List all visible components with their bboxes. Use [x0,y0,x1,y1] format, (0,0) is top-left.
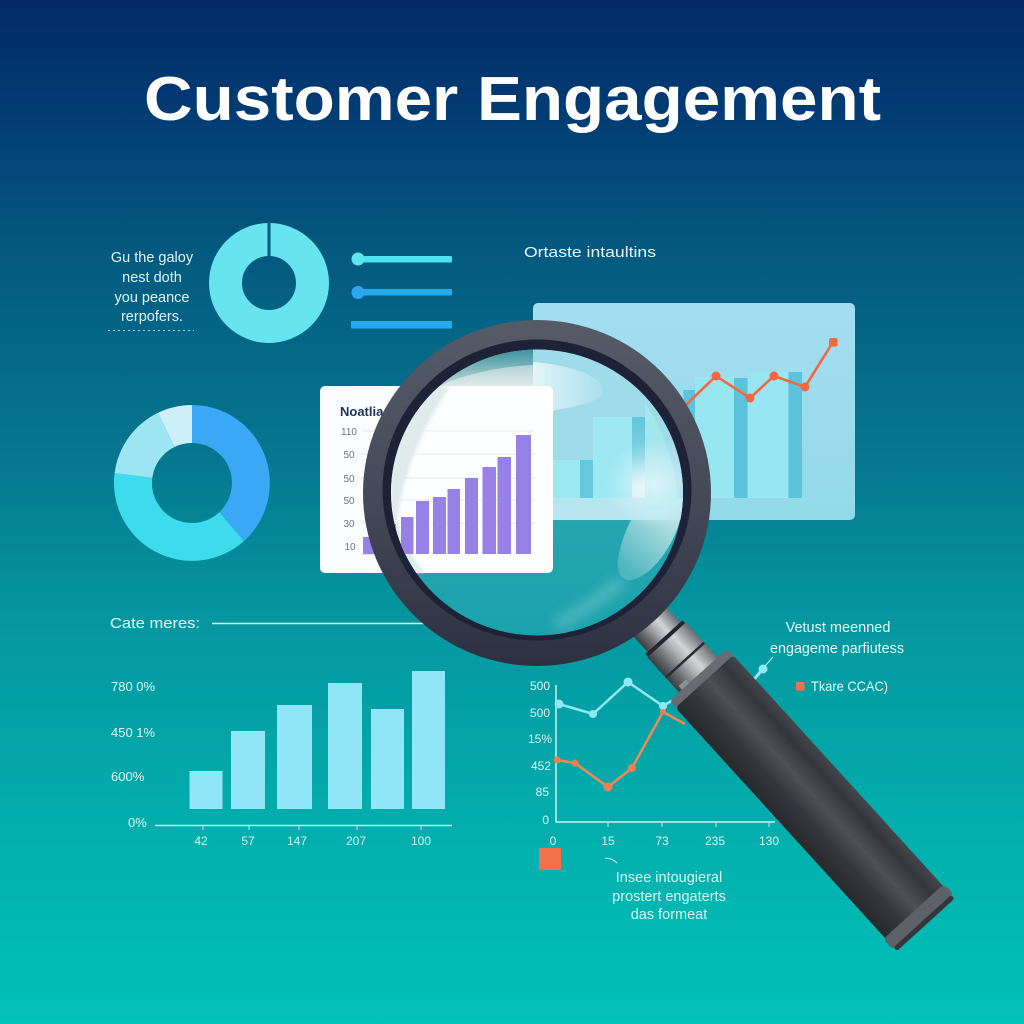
line chart: bottom right: 15% [528,732,552,746]
panel: white card with purple bar chart: 50 [343,450,355,461]
bar chart: bottom left: 600% [111,769,145,784]
panel: glass line and bar chart [533,303,855,520]
bar chart: bottom left [111,671,452,848]
line chart: bottom right: 0 [542,813,549,827]
text block: top left note: rerpofers. [121,309,183,325]
magnifier lens [385,349,705,636]
panel: white card with purple bar chart: 50 [343,496,355,507]
text block: top left note: nest doth [122,270,182,286]
bar chart: bottom left: 100 [411,834,431,848]
callout: right note: Tkare CCAC) [811,678,888,694]
text block: bottom insight: das formeat [631,907,707,923]
text block: top left note: you peance [115,290,189,306]
legend marker: orange square [539,848,561,870]
text block: bottom insight: Insee intougieral [616,870,722,886]
line chart: bottom right: 0 [550,834,557,848]
line chart: bottom right: 130 [759,834,779,848]
panel: white card with purple bar chart: Noatlia [340,404,384,419]
text block: top left note: Gu the galoy [111,250,194,266]
panel: white card with purple bar chart: 10 [344,542,356,553]
panel: white card with purple bar chart: 50 [343,474,355,485]
magnifier ring [363,320,711,666]
chart: bottom left heading and rule [110,615,487,632]
panel: white card with purple bar chart [320,386,553,573]
lens lower glare [618,520,680,580]
line chart: bottom right [528,678,779,848]
text block: bottom insight [605,858,726,923]
bar chart: bottom left: 147 [287,834,307,848]
card seen through lens [391,386,553,573]
panel: white card with purple bar chart: 110 [341,427,357,438]
title: Customer Engagement [144,65,881,134]
line chart: bottom right: 500 [530,679,550,693]
bar chart: bottom left: 42 [194,834,208,848]
chart: bottom left heading and rule: Cate meres: [110,615,200,632]
donut chart: segmented [114,405,270,561]
callout: right note: engageme parfiutess [770,641,904,657]
magnifier inner rim [382,340,692,640]
line chart: bottom right: 235 [705,834,725,848]
text block: bottom insight: prostert engaterts [612,889,726,905]
legend bars [351,252,452,328]
callout: right note [750,620,904,694]
bar chart: bottom left: 780 0% [111,679,156,694]
magnifier handle [619,593,956,952]
text block: top left note [108,250,194,330]
heading: top right panel: Ortaste intaultins [524,245,656,261]
callout: right note: Vetust meenned [786,620,890,636]
donut chart: top [226,222,312,326]
line chart: bottom right: 500 [530,706,550,720]
bar chart: bottom left: 0% [128,815,147,830]
line chart: bottom right: 15 [601,834,615,848]
lens right glare [645,403,678,510]
bar chart: bottom left: 450 1% [111,725,156,740]
line chart: bottom right: 452 [531,759,551,773]
bar chart: bottom left: 57 [241,834,255,848]
line chart: bottom right: 73 [655,834,669,848]
line chart: bottom right: 85 [536,785,549,799]
icon: magnifying glass [363,320,956,952]
lens top highlight [533,362,603,414]
bar chart: bottom left: 207 [346,834,366,848]
panel: white card with purple bar chart: 30 [343,519,355,530]
